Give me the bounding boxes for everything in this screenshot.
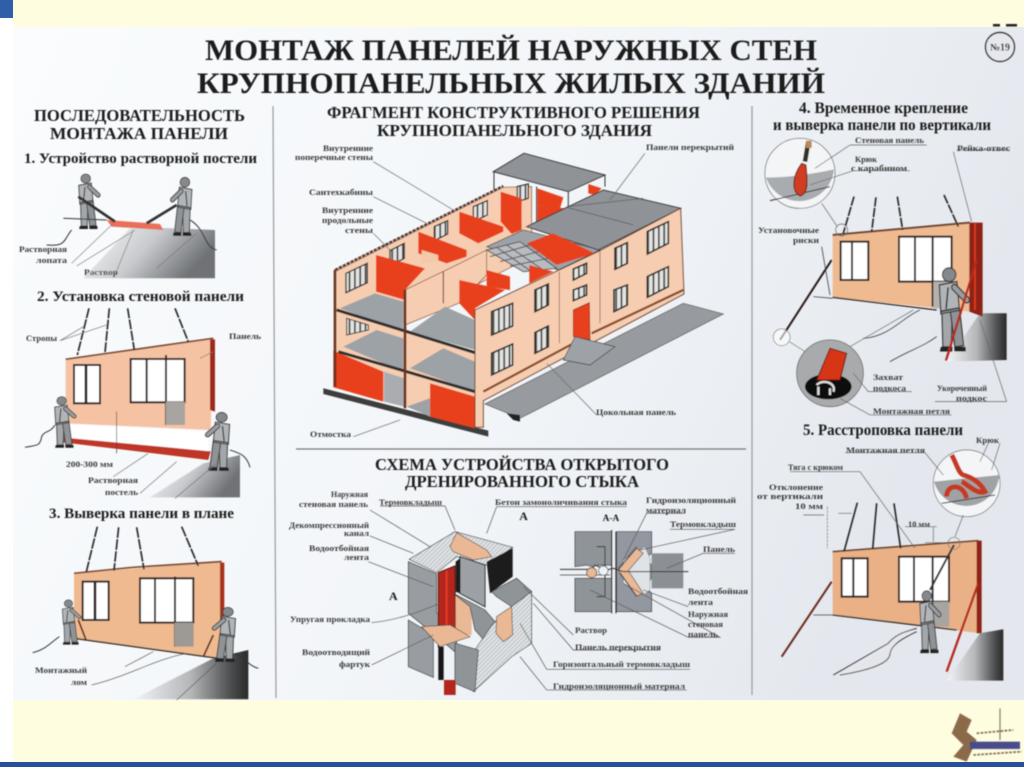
building labels — [295, 143, 734, 439]
step 5 labels: 10 мм — [795, 502, 824, 511]
joint labels: Гидроизоляционный материал — [553, 682, 686, 691]
step 2: wall panel installation: Стропы — [26, 334, 58, 343]
step 5 labels: 10 мм — [908, 520, 931, 529]
joint labels: канал — [344, 529, 370, 538]
joint labels: панель — [688, 630, 719, 639]
building labels: Внутренние — [322, 206, 374, 215]
step 3: panel alignment in plan: лом — [71, 678, 88, 687]
panel: assembly sequence — [19, 106, 262, 700]
worker right — [214, 607, 235, 662]
joint 3D illustration: А — [519, 509, 528, 523]
logo bottom right — [952, 708, 1022, 762]
heading: sequence: ПОСЛЕДОВАТЕЛЬНОСТЬ — [34, 106, 245, 125]
step 4 labels: Укороченный — [937, 384, 987, 393]
building labels: продольные — [322, 216, 374, 225]
red wall centre — [459, 280, 505, 320]
step 2: wall panel installation — [25, 289, 262, 498]
dividers — [273, 106, 752, 698]
step 2: wall panel installation: постель — [105, 488, 139, 497]
joint labels: Водоотбойная — [309, 544, 370, 553]
heading: joint: ДРЕНИРОВАННОГО СТЫКА — [405, 472, 639, 491]
worker — [920, 591, 939, 653]
title: КРУПНОПАНЕЛЬНЫХ ЖИЛЫХ ЗДАНИЙ — [197, 67, 825, 100]
joint labels: стеновая — [688, 620, 724, 629]
joint labels — [289, 490, 749, 691]
top roof panel — [493, 153, 605, 192]
pavement — [485, 303, 723, 418]
building labels: Отмостка — [310, 430, 351, 439]
joint labels: Водоотбойная — [688, 587, 749, 596]
joint labels: Термовкладыш — [670, 520, 736, 529]
ground floor red walls — [333, 351, 383, 402]
step 1: mortar bed: Раствор — [84, 268, 119, 277]
joint labels: Панель — [703, 545, 736, 554]
lower wall — [335, 310, 405, 407]
heading: building fragment: КРУПНОПАНЕЛЬНОГО ЗДАНИЯ — [377, 121, 652, 140]
heading: joint — [375, 455, 669, 491]
step 5 labels: от вертикали — [757, 492, 824, 501]
joint 3D illustration: А — [389, 589, 398, 603]
foundation — [323, 388, 488, 437]
step 1: mortar bed — [19, 151, 257, 278]
step 4 labels: Захват — [873, 373, 903, 382]
heading: step 5: 5. Расстроповка панели — [803, 422, 963, 439]
heading: step 4 — [773, 100, 991, 134]
step 2: wall panel installation: Панель — [229, 332, 262, 341]
step 4 labels: Установочные — [758, 226, 820, 235]
panel: step 5 unslinging — [757, 422, 1003, 681]
worker left — [79, 174, 98, 229]
building labels: Панели перекрытий — [646, 143, 734, 152]
step 5 labels: Отклонение — [769, 483, 824, 492]
step 3: panel alignment in plan: Монтажный — [35, 666, 87, 675]
step 4 labels: Крюк — [855, 155, 877, 164]
step 4 labels: Монтажная петля — [873, 407, 951, 416]
step 2: wall panel installation: 200-300 мм — [66, 460, 114, 469]
step 4 labels: Рейка-отвес — [957, 144, 1011, 153]
joint labels: Водоотводящий — [302, 648, 370, 657]
title: МОНТАЖ ПАНЕЛЕЙ НАРУЖНЫХ СТЕН — [205, 34, 817, 67]
worker left — [55, 397, 74, 448]
worker right — [172, 177, 192, 236]
step 1: mortar bed: Растворная — [19, 245, 68, 254]
page number fragment — [993, 24, 1017, 26]
step 1: mortar bed: 1. Устройство растворной постели — [24, 151, 257, 167]
back wall — [335, 187, 532, 357]
worker left — [62, 600, 79, 645]
step 5 illustration — [782, 443, 1003, 681]
step 3: panel alignment in plan: 3. Выверка панели в плане — [49, 506, 234, 522]
step 2: wall panel installation: 2. Установка стеновой панели — [37, 289, 244, 305]
building illustration — [323, 153, 723, 437]
joint labels: Упругая прокладка — [290, 615, 370, 624]
joint labels: лента — [688, 598, 713, 607]
joint labels: Горизонтальный термовкладыш — [553, 660, 690, 669]
panel: building structure — [295, 103, 734, 439]
building labels: поперечные стены — [295, 153, 374, 162]
inset: hook — [765, 138, 835, 208]
joint labels: Наружная — [331, 490, 369, 499]
joint labels: лента — [344, 553, 369, 562]
step 4 illustration — [765, 138, 1010, 415]
step 4 labels: риски — [793, 236, 819, 245]
joint labels: Панель перекрытия — [575, 643, 662, 652]
panel: drained joint — [289, 455, 749, 695]
step 5 labels — [757, 436, 999, 529]
building labels: Внутренние — [323, 144, 374, 153]
worker — [939, 268, 967, 351]
step 4 labels: подкос — [956, 394, 988, 403]
joint labels: Бетон замоноличивания стыка — [495, 498, 627, 507]
step 4 labels — [758, 136, 1011, 416]
joint labels: Наружная — [688, 610, 729, 619]
joint labels: Декомпрессионный — [289, 521, 369, 530]
joint labels: Раствор — [575, 626, 608, 635]
slab edges — [337, 310, 478, 393]
leader lines — [353, 153, 645, 437]
joint section A-A — [560, 513, 735, 637]
central slabs — [487, 230, 600, 270]
joint labels: фартук — [339, 660, 370, 669]
heading: joint: СХЕМА УСТРОЙСТВА ОТКРЫТОГО — [375, 455, 669, 474]
joint section A-A: А-А — [603, 514, 619, 524]
joint labels: Гидроизоляционный — [646, 496, 736, 505]
heading: sequence — [34, 106, 245, 143]
heading: step 4: 4. Временное крепление — [799, 100, 968, 117]
heading: step 4: и выверка панели по вертикали — [773, 117, 991, 134]
step 1: mortar bed: лопата — [36, 256, 67, 265]
heading: building fragment: ФРАГМЕНТ КОНСТРУКТИВНОГО РЕШЕНИЯ — [327, 103, 700, 122]
interior pink wall — [405, 250, 487, 325]
step 4 labels: подкоса — [873, 384, 906, 393]
building labels: стены — [345, 226, 374, 235]
joint labels: Термовкладыш — [379, 498, 442, 507]
heading: sequence: МОНТАЖА ПАНЕЛИ — [50, 124, 228, 143]
inset: loop — [797, 340, 863, 407]
joint labels: стеновая панель — [299, 500, 369, 509]
worker right — [207, 412, 230, 471]
badge: poster number: №19 — [990, 42, 1010, 54]
step 5 labels: Крюк — [976, 436, 999, 445]
badge: poster number — [986, 32, 1014, 62]
step 5 labels: Монтажная петля — [846, 446, 926, 455]
panel: step 4 temporary fixing — [758, 100, 1011, 416]
step 4 labels: с карабином — [851, 164, 908, 173]
building labels: Цокольная панель — [596, 408, 677, 417]
joint 3D illustration — [368, 506, 690, 695]
front facade — [475, 208, 684, 427]
building labels: Сантехкабины — [309, 188, 374, 197]
inset: hook release — [933, 450, 1000, 517]
step 2: wall panel installation: Растворная — [88, 476, 139, 485]
step 5 labels: Тяга с крюком — [788, 463, 844, 472]
title — [197, 34, 825, 100]
heading: building fragment — [327, 103, 700, 140]
step 4 labels: Стеновая панель — [855, 136, 925, 145]
joint labels: материал — [646, 506, 687, 515]
red walls rear — [501, 192, 522, 234]
step 3: panel alignment in plan — [33, 506, 258, 700]
upper floor slabs — [340, 293, 403, 332]
